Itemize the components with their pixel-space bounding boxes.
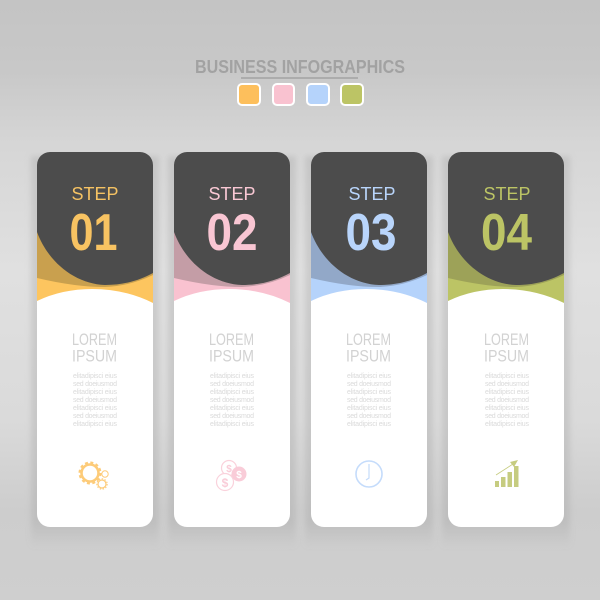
heading: STEP xyxy=(208,184,256,204)
text block: elitadipisci eius xyxy=(347,389,392,396)
text block: LOREM xyxy=(346,331,391,349)
panel: step 03 xyxy=(305,152,433,548)
text block: LOREM xyxy=(72,331,117,349)
text block: sed doeiusmod xyxy=(485,381,529,388)
heading: STEP xyxy=(71,184,119,204)
text block xyxy=(484,331,530,428)
heading: STEP xyxy=(348,184,396,204)
panel: step 04 xyxy=(442,152,570,548)
text block: elitadipisci eius xyxy=(347,421,392,428)
icon: coins: $ xyxy=(236,470,242,481)
text block: sed doeiusmod xyxy=(210,381,254,388)
text block: IPSUM xyxy=(484,348,529,366)
text block: LOREM xyxy=(484,331,529,349)
text block: elitadipisci eius xyxy=(347,373,392,380)
text block: LOREM xyxy=(209,331,254,349)
text block: sed doeiusmod xyxy=(73,413,117,420)
text block xyxy=(209,331,254,428)
text block: elitadipisci eius xyxy=(210,421,254,428)
text block: elitadipisci eius xyxy=(485,373,530,380)
text block: elitadipisci eius xyxy=(73,405,118,412)
text block: elitadipisci eius xyxy=(347,405,392,412)
text block: sed doeiusmod xyxy=(210,413,254,420)
number: 02 xyxy=(206,204,258,262)
text block: elitadipisci eius xyxy=(485,405,530,412)
text block: sed doeiusmod xyxy=(73,397,117,404)
icon: clock xyxy=(356,461,382,487)
number: 01 xyxy=(70,204,118,262)
text block: elitadipisci eius xyxy=(210,389,254,396)
text block xyxy=(72,331,118,428)
text block: sed doeiusmod xyxy=(485,397,529,404)
text block: IPSUM xyxy=(346,348,391,366)
panel: step 01 xyxy=(31,152,159,548)
icon: coins: $ xyxy=(222,476,229,490)
title: BUSINESS INFOGRAPHICS xyxy=(195,57,405,77)
text block: sed doeiusmod xyxy=(73,381,117,388)
text block: sed doeiusmod xyxy=(347,413,391,420)
text block: sed doeiusmod xyxy=(347,397,391,404)
icon: gears xyxy=(80,462,108,489)
text block: sed doeiusmod xyxy=(347,381,391,388)
heading: STEP xyxy=(483,184,531,204)
text block: elitadipisci eius xyxy=(73,389,118,396)
text block: elitadipisci eius xyxy=(73,421,118,428)
text block: elitadipisci eius xyxy=(73,373,118,380)
text block: elitadipisci eius xyxy=(485,389,530,396)
text block: elitadipisci eius xyxy=(210,373,254,380)
text block xyxy=(346,331,392,428)
colour swatches xyxy=(238,84,363,105)
text block: sed doeiusmod xyxy=(485,413,529,420)
number: 03 xyxy=(346,204,396,262)
number: 04 xyxy=(481,204,532,262)
icon: coins: $ xyxy=(226,464,232,475)
icon: coins xyxy=(216,460,246,490)
text block: IPSUM xyxy=(72,348,117,366)
panel: step 02 xyxy=(168,152,296,548)
text block: elitadipisci eius xyxy=(210,405,254,412)
text block: elitadipisci eius xyxy=(485,421,530,428)
icon: growth chart xyxy=(495,460,518,487)
text block: IPSUM xyxy=(209,348,254,366)
text block: sed doeiusmod xyxy=(210,397,254,404)
